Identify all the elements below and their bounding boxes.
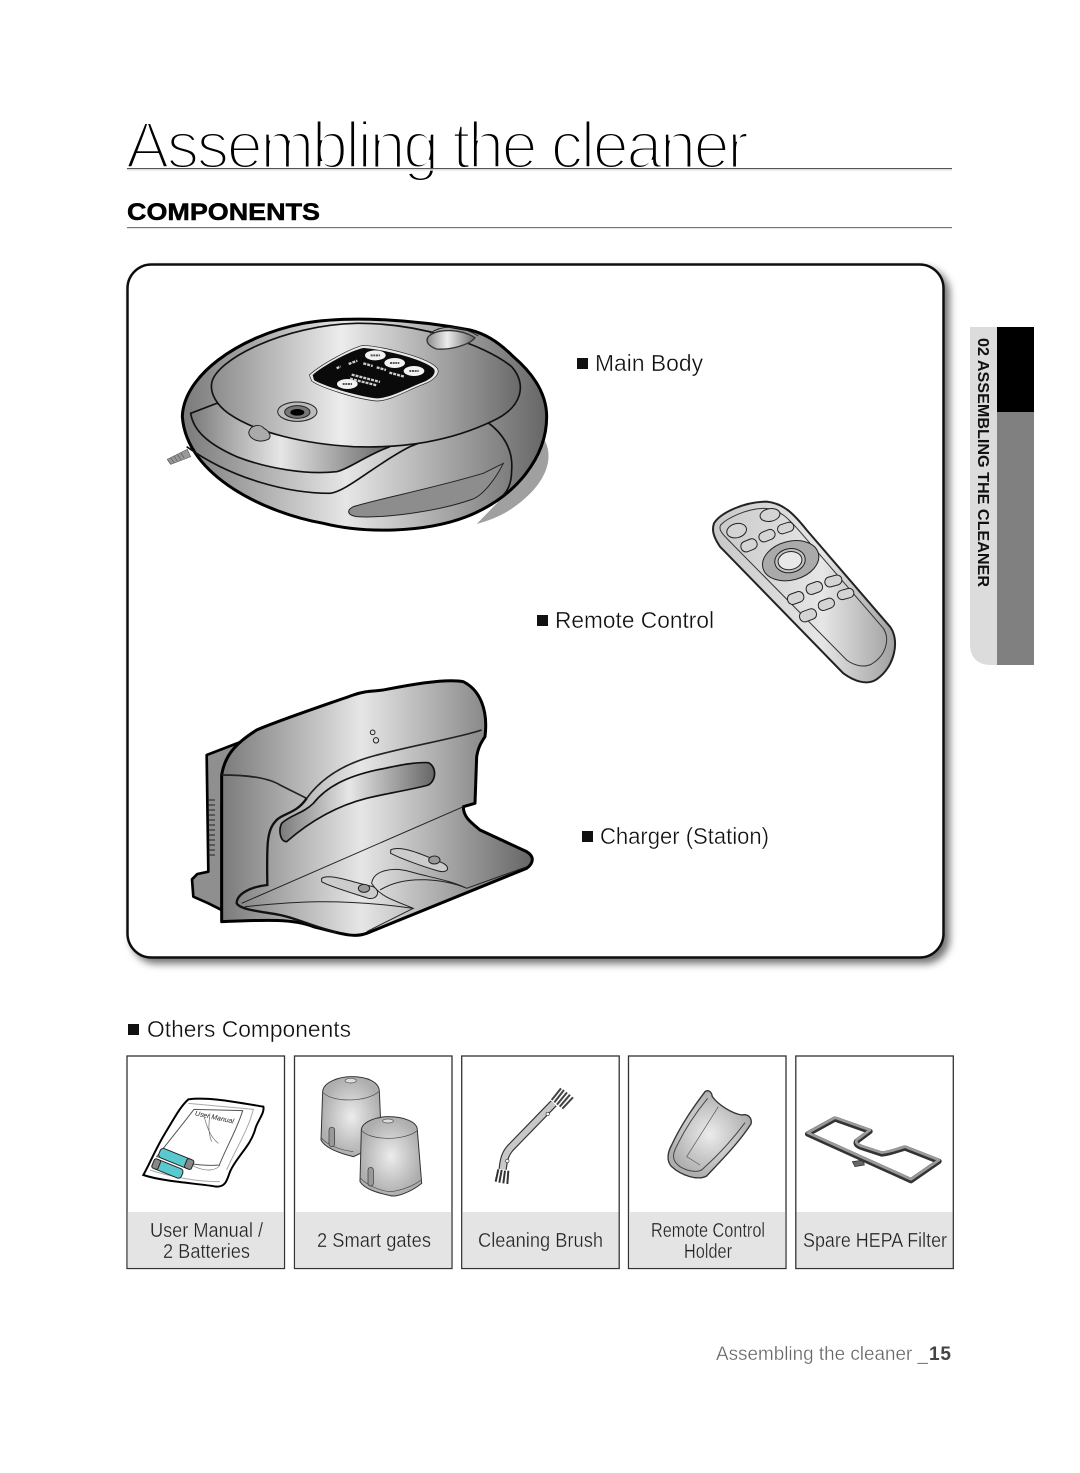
icon: brush (496, 1088, 573, 1184)
caption: Remote Control (651, 1220, 765, 1242)
heading: components: COMPONENTS (127, 199, 320, 226)
icon: charger station (192, 681, 532, 935)
caption: Cleaning Brush (478, 1230, 603, 1252)
icon: robot main body (167, 319, 549, 530)
label: remote control: Remote Control (555, 607, 714, 633)
card: user manual and batteries (127, 1056, 284, 1268)
label: main body: Main Body (595, 350, 703, 376)
caption: 2 Smart gates (317, 1230, 431, 1252)
icon: holder (668, 1091, 751, 1178)
icon: filter frame (808, 1118, 939, 1181)
caption (651, 1220, 765, 1263)
control panel (309, 345, 438, 401)
side tab: 02 ASSEMBLING THE CLEANER (974, 338, 991, 587)
caption: Holder (684, 1241, 732, 1263)
icon: manual bag (143, 1099, 264, 1187)
icon: remote control (713, 502, 895, 682)
label: others components: Others Components (147, 1016, 351, 1042)
label: charger station: Charger (Station) (600, 823, 769, 849)
caption: Spare HEPA Filter (803, 1230, 947, 1252)
side tab (970, 327, 1034, 665)
icon: two smart gates (321, 1077, 422, 1196)
card: spare HEPA filter (796, 1056, 953, 1268)
panel: main components (128, 264, 944, 958)
icon: manual bag: User Manual (194, 1110, 235, 1126)
caption: 2 Batteries (163, 1241, 250, 1263)
card: remote control holder (628, 1056, 786, 1268)
footer page number: Assembling the cleaner _ (716, 1344, 928, 1365)
footer page number: 15 (929, 1344, 951, 1365)
caption (150, 1220, 263, 1263)
title: Assembling the cleaner (126, 108, 748, 182)
card: cleaning brush (462, 1056, 619, 1268)
caption: User Manual / (150, 1220, 263, 1242)
card: smart gates (294, 1056, 452, 1268)
